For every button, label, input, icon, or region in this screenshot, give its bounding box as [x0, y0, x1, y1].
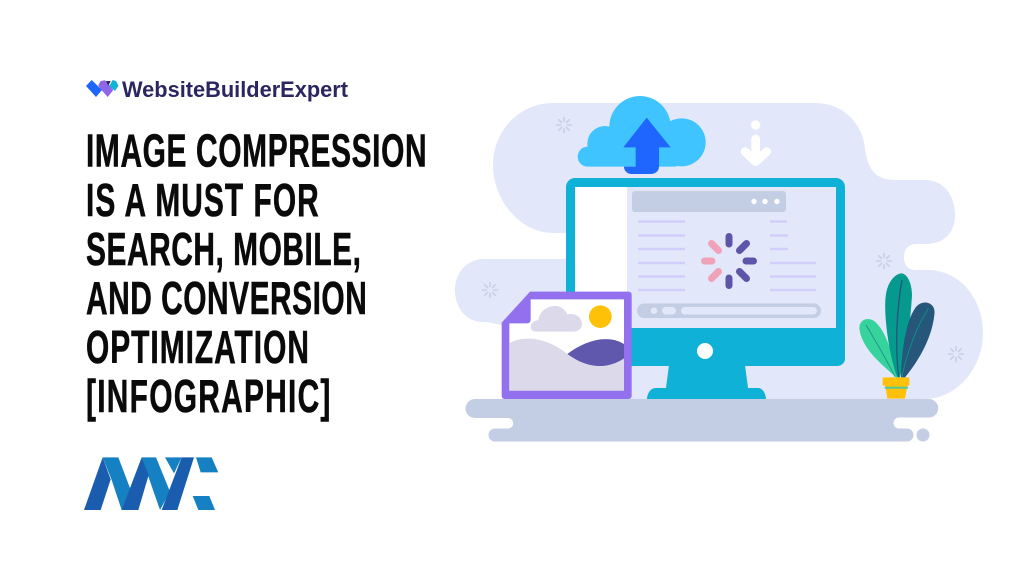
image sun	[589, 305, 612, 328]
text lines right	[770, 222, 816, 290]
loading spinner	[704, 236, 754, 286]
power button	[697, 343, 713, 359]
monitor stand	[647, 365, 766, 400]
background blob	[455, 103, 983, 399]
title: AND CONVERSION	[86, 274, 367, 325]
icon: download arrow	[745, 120, 767, 162]
monitor screen	[575, 187, 836, 328]
logo: WebsiteBuilderExpert	[86, 77, 349, 102]
logo wordmark: WebsiteBuilderExpert	[122, 77, 349, 102]
title: IS A MUST FOR	[86, 176, 319, 227]
title: [INFOGRAPHIC]	[86, 372, 330, 423]
image cloud	[531, 306, 582, 332]
title: OPTIMIZATION	[86, 323, 309, 374]
image dark hill	[567, 339, 624, 366]
icon: WBE logo mark	[86, 80, 118, 97]
illustration: website image loading	[455, 96, 983, 442]
title	[86, 126, 427, 423]
shelf dot	[916, 428, 930, 442]
title: IMAGE COMPRESSION	[86, 126, 427, 177]
image hill	[509, 339, 624, 391]
image card	[502, 292, 632, 399]
icon: potted plant	[859, 273, 935, 399]
monitor frame	[566, 178, 845, 366]
search bar	[637, 304, 821, 318]
title: SEARCH, MOBILE,	[86, 225, 361, 276]
text lines left	[638, 222, 685, 290]
icon: MT brand logo	[84, 457, 218, 510]
monitor	[566, 178, 845, 400]
icon: cloud upload	[578, 96, 706, 174]
sparkle	[482, 118, 964, 362]
shelf	[466, 399, 938, 442]
browser header bar	[632, 191, 786, 212]
